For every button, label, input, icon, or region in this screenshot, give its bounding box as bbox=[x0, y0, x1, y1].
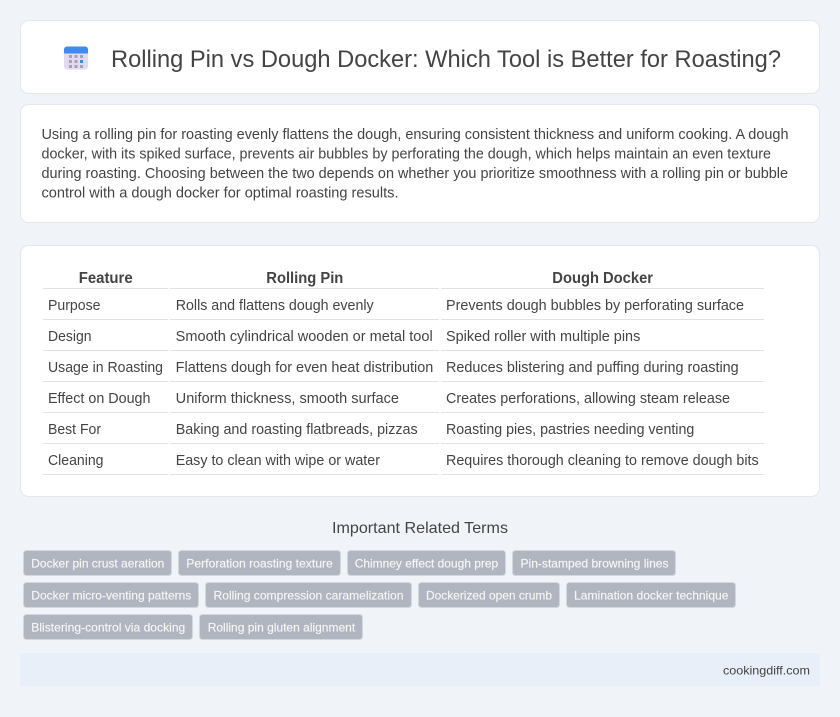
row: best for bbox=[48, 422, 694, 438]
row: purpose: Purpose bbox=[48, 298, 100, 314]
related term tags: Docker micro-venting patterns bbox=[31, 588, 191, 602]
related term tags: Dockerized open crumb bbox=[426, 588, 552, 602]
row: cleaning bbox=[48, 453, 759, 469]
row: cleaning: Cleaning bbox=[48, 453, 104, 469]
row: purpose: Prevents dough bubbles by perforating surface bbox=[446, 298, 744, 314]
row: usage in roasting: Reduces blistering and puffing during roasting bbox=[446, 360, 739, 376]
text block: introduction: docker, with its spiked surface, prevents air bubbles by perforating the dough, which helps maintain an even texture bbox=[42, 146, 771, 162]
related term tags: Rolling pin gluten alignment bbox=[208, 620, 356, 634]
row: design bbox=[48, 329, 640, 345]
panel: introduction bbox=[20, 104, 820, 222]
related term tags: Pin-stamped browning lines bbox=[520, 556, 668, 570]
row: cleaning: Requires thorough cleaning to remove dough bits bbox=[446, 453, 759, 469]
row: effect on dough: Effect on Dough bbox=[48, 391, 150, 407]
row: design: Design bbox=[48, 329, 92, 345]
related term tags bbox=[24, 550, 736, 640]
row: best for: Baking and roasting flatbreads, pizzas bbox=[176, 422, 418, 438]
row: usage in roasting: Usage in Roasting bbox=[48, 360, 163, 376]
related term tags: Lamination docker technique bbox=[574, 588, 729, 602]
icon: calendar bbox=[64, 46, 88, 70]
related term tags: Docker pin crust aeration bbox=[31, 556, 164, 570]
row: effect on dough: Uniform thickness, smooth surface bbox=[176, 391, 399, 407]
panel: comparison table bbox=[20, 246, 820, 496]
row: design: Smooth cylindrical wooden or metal tool bbox=[176, 329, 433, 345]
table header row bbox=[79, 270, 653, 287]
table header row: Rolling Pin bbox=[266, 270, 343, 287]
related term tags: Blistering-control via docking bbox=[31, 620, 185, 634]
row: usage in roasting: Flattens dough for even heat distribution bbox=[176, 360, 433, 376]
related term tags: Chimney effect dough prep bbox=[355, 556, 499, 570]
table header row: Dough Docker bbox=[552, 270, 653, 287]
row: cleaning: Easy to clean with wipe or water bbox=[176, 453, 380, 469]
row: usage in roasting bbox=[48, 360, 739, 376]
text block: introduction: during roasting. Choosing between the two depends on whether you prioritize smoothness with a rolling pin or bubble bbox=[42, 166, 788, 182]
row: purpose: Rolls and flattens dough evenly bbox=[176, 298, 374, 314]
row: effect on dough: Creates perforations, allowing steam release bbox=[446, 391, 730, 407]
table header row: Feature bbox=[79, 270, 133, 287]
related term tags: Perforation roasting texture bbox=[186, 556, 333, 570]
related term tags: Rolling compression caramelization bbox=[214, 588, 404, 602]
row: design: Spiked roller with multiple pins bbox=[446, 329, 640, 345]
title: Rolling Pin vs Dough Docker: Which Tool is Better for Roasting? bbox=[111, 46, 781, 73]
text block: introduction bbox=[42, 127, 788, 202]
footer source label: cookingdiff.com bbox=[723, 664, 810, 678]
text block: introduction: control with a dough docker for optimal roasting results. bbox=[42, 186, 399, 202]
text block: introduction: Using a rolling pin for roasting evenly flattens the dough, ensuring consistent thickness and uniform cooking. A dough bbox=[42, 127, 788, 143]
heading: important related terms: Important Related Terms bbox=[332, 520, 508, 537]
header panel bbox=[20, 20, 820, 94]
row: effect on dough bbox=[48, 391, 730, 407]
row: best for: Best For bbox=[48, 422, 101, 438]
row: best for: Roasting pies, pastries needing venting bbox=[446, 422, 694, 438]
row: purpose bbox=[48, 298, 744, 314]
footer bbox=[20, 653, 820, 686]
